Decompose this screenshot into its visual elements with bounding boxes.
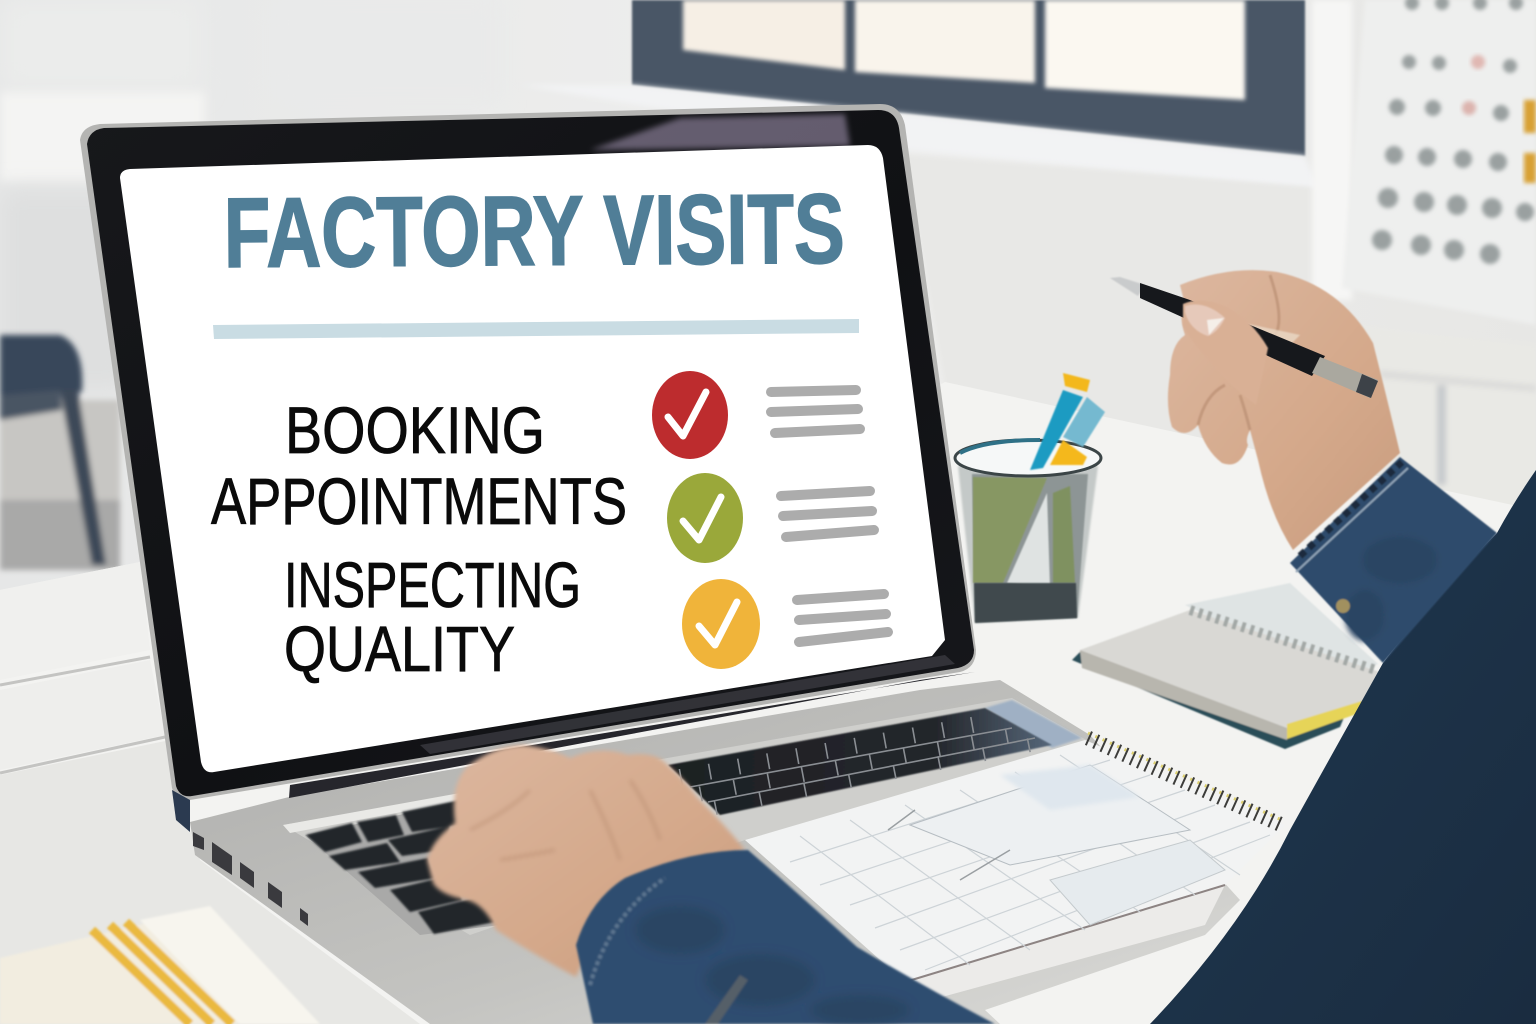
label: Booking Appointments [211,393,627,538]
right denim cuff [1290,457,1497,663]
spiral binding [1088,738,1284,826]
notebook on keyboard with grid sheet [745,733,1285,1003]
right hand [1168,270,1400,550]
icon: yellow check [682,579,760,669]
title: FACTORY VISITS: FACTORY VISITS [223,173,845,288]
pot rim and interior [955,440,1101,476]
label: Booking Appointments: APPOINTMENTS [211,464,627,538]
icon: red check [652,371,728,459]
wall calendar [1342,0,1536,325]
keyboard backing and keys [985,700,1082,748]
pot mesh outer shell [958,466,1098,623]
laptop base with keyboard [190,672,1240,1024]
chair at left [0,335,120,570]
pen [1110,277,1378,398]
desk [0,382,1536,1024]
right thumb over pen [1183,300,1268,405]
book and yellow pencils at bottom-left [0,906,320,1024]
icon: green check [667,473,743,563]
placeholder lines row 2 [781,491,874,537]
left hand on keyboard [427,745,745,977]
denim jacket torso [1150,470,1536,1024]
left denim sleeve [576,850,995,1024]
label: Inspecting Quality [284,549,581,685]
cabinet at right [1350,325,1536,530]
placeholder lines row 3 [797,594,888,642]
placeholder lines row 1 [771,390,860,433]
laptop screen display [120,145,945,772]
label: Inspecting Quality: INSPECTING [284,549,581,621]
pens [1030,373,1105,470]
label: Booking Appointments: BOOKING [285,393,545,467]
laptop screen lid [80,104,976,832]
notebook on desk right [1072,583,1383,749]
divider bar [213,319,859,339]
label: Inspecting Quality: QUALITY [284,613,515,685]
pen pot with pens [955,373,1105,623]
window [520,0,1352,470]
side ports [193,832,308,926]
